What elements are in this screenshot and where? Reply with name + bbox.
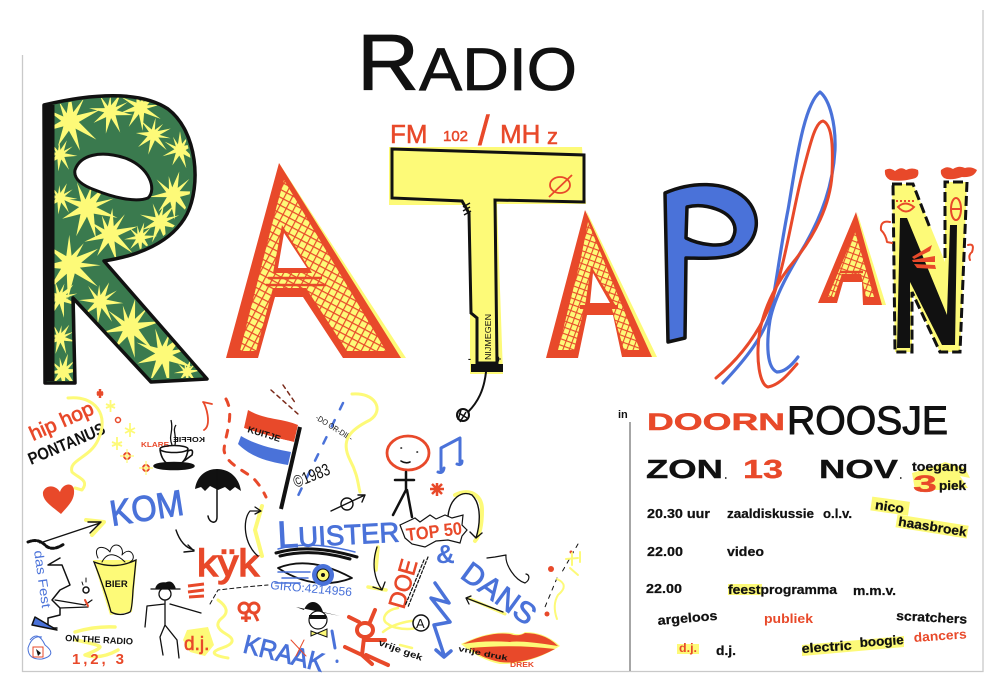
letter L, blue and red strokes	[716, 92, 835, 387]
admission yellow highlight	[912, 462, 970, 490]
blue zigzag arrow	[431, 583, 451, 657]
programme: video: video	[727, 544, 764, 559]
text: DOE vertical: DOE	[384, 556, 424, 612]
red crossed lines	[291, 640, 306, 656]
venue: DOORN: DOORN	[647, 409, 785, 436]
text: mirrored KOFFIE: KOFFIE	[173, 435, 205, 444]
text: KUITJE: KUITJE	[246, 424, 282, 444]
act: boogie: boogie	[859, 632, 904, 650]
text: in: in	[618, 409, 628, 421]
act: publiek: publiek	[764, 611, 814, 626]
name: nico	[870, 497, 910, 517]
arrow from DANS	[466, 596, 505, 614]
text: FM 102 / MHz: MH	[500, 119, 540, 149]
circled arrow	[331, 495, 365, 511]
admission: 3: 3	[913, 471, 937, 498]
panel: event information	[618, 399, 970, 671]
programme: zaaldiskussie: zaaldiskussie	[727, 506, 814, 521]
icon: lips	[461, 632, 560, 664]
highlight behind electric boogie	[802, 636, 904, 656]
dotted chain	[210, 585, 268, 604]
plus and minus signs: -	[468, 354, 471, 364]
logo scribble	[28, 636, 51, 659]
text: kijk: kÿk	[197, 543, 260, 585]
dashes above flag	[271, 385, 298, 414]
text: FM 102 / MHz: z	[547, 124, 558, 149]
text: FM 102 / MHz: /	[478, 107, 490, 154]
text: copyright 1983: ©1983	[290, 460, 333, 492]
red hair tufts	[885, 167, 977, 181]
text: das Fest: das Fest	[31, 549, 54, 609]
date periods	[725, 477, 902, 479]
T scribble	[463, 203, 471, 215]
arrow under Luister	[368, 547, 386, 590]
text: KLARE: KLARE	[141, 442, 169, 449]
sketch panel: doodles	[25, 385, 580, 676]
face: red mouth	[912, 245, 936, 269]
date: 13: 13	[743, 454, 783, 484]
icon: eye	[275, 545, 357, 586]
face: nose symbol	[951, 198, 961, 220]
act: dancers: dancers	[913, 626, 967, 645]
text: FM 102 / MHz: FM	[390, 119, 428, 149]
yellow blob with d.j.	[183, 627, 214, 656]
plus and minus signs: +	[496, 354, 501, 364]
symbol: crossed circle on T	[549, 175, 572, 197]
circled A: A	[416, 616, 425, 631]
admission: toegang: toegang	[912, 459, 967, 474]
text: NIJMEGEN: NIJMEGEN	[484, 314, 493, 360]
name: nico: nico	[874, 497, 905, 516]
text: ON THE RADIO: ON THE RADIO	[65, 633, 133, 647]
text: vrije druk: vrije druk	[458, 644, 510, 663]
red asterisk	[430, 483, 444, 496]
time: 22.00: 22.00	[647, 544, 683, 559]
letter T, yellow	[389, 147, 586, 422]
blue stroke	[723, 92, 835, 383]
yellow loops	[383, 608, 425, 648]
text: TOP 50: TOP 50	[405, 518, 463, 545]
face: eye	[896, 201, 914, 212]
dashed black line	[405, 557, 428, 607]
face: ears	[881, 222, 973, 260]
red creature	[345, 610, 388, 665]
heading: RADIO: RADIO	[357, 18, 577, 107]
text: KOM: KOM	[107, 482, 186, 534]
profile face	[32, 558, 92, 630]
text: hip hop: hip hop	[26, 398, 97, 446]
hair scribble	[28, 541, 64, 548]
flagpole	[281, 427, 300, 509]
time: 20.30 uur: 20.30 uur	[647, 506, 710, 521]
act: red d.j.: d.j.	[679, 641, 697, 655]
admission: piek: piek	[939, 478, 967, 493]
text: 1,2,3: 1,2, 3	[72, 651, 124, 668]
date: NOV.: NOV	[819, 454, 899, 484]
text: DREK: DREK	[510, 660, 535, 669]
text: Luister: LUISTER	[276, 509, 400, 557]
letter R, green and yellow splatter	[42, 94, 209, 385]
icon: coffee cup	[154, 420, 194, 470]
text: ON THE RADIO	[65, 627, 133, 668]
plug and cord	[457, 372, 486, 422]
yellow squiggle right of 1983	[346, 394, 377, 492]
text: BIER: BIER	[105, 579, 128, 590]
red dashed trail	[224, 399, 266, 497]
icon: blue music notes	[438, 438, 462, 472]
programme: o.l.v.: o.l.v.	[823, 506, 852, 521]
blue dashed line	[295, 403, 343, 502]
arrow to KOM	[40, 520, 104, 543]
programme: feestprogramma: feestprogramma	[728, 582, 838, 597]
name: haasbroek: haasbroek	[897, 514, 969, 540]
icon: heart	[43, 484, 74, 514]
highlight behind feest	[728, 584, 762, 595]
dancing man	[145, 582, 201, 658]
arrow from KOM to kijk	[176, 530, 194, 552]
icon: umbrella	[195, 469, 241, 522]
man with bowler hat	[296, 602, 340, 637]
act: argeloos: argeloos	[657, 608, 718, 628]
red venus symbols	[239, 603, 259, 622]
exclamation mark	[332, 631, 337, 662]
second letter A, red hatched	[546, 210, 657, 358]
battery base	[471, 364, 503, 372]
text: d.j.: d.j.	[184, 634, 209, 655]
red stroke	[716, 121, 832, 387]
letter P, blue	[665, 185, 756, 342]
icon: beer glass	[93, 545, 137, 615]
yellow zigzag	[214, 600, 232, 658]
divider with in	[629, 422, 631, 671]
icon: red music note	[203, 402, 212, 430]
letter A, red hatched	[226, 163, 406, 358]
burst: TOP 50	[400, 515, 467, 547]
small letter A, red hatched	[818, 212, 886, 305]
text: vrije gek: vrije gek	[377, 637, 425, 663]
text: FM 102 / MHz: 102	[443, 128, 468, 145]
flag: KUITJE	[238, 410, 300, 509]
yellow squiggle to heart	[68, 398, 102, 490]
ampersand: &	[436, 539, 455, 569]
act: electric: electric	[801, 638, 852, 656]
right dots and dashes	[544, 544, 580, 619]
highlight behind red d.j.	[677, 644, 699, 654]
act: scratchers: scratchers	[896, 608, 968, 627]
time: second 22.00: 22.00	[646, 581, 682, 596]
text: DANS: DANS	[455, 556, 542, 632]
stick figure with red head	[387, 436, 429, 517]
letter N, yellow and black with face	[881, 167, 977, 352]
arrow beside Luister	[245, 506, 262, 556]
act: black d.j.: d.j.	[716, 643, 736, 658]
text: PONTANUS: PONTANUS	[25, 419, 108, 469]
decorative stars and flowers	[97, 389, 153, 475]
curl line	[487, 555, 529, 583]
circled A	[413, 615, 429, 631]
venue: ROOSJE: ROOSJE	[787, 399, 948, 443]
date: ZON.: ZON	[646, 454, 723, 484]
text: DO OR DIE: -DO OR-DIE-	[314, 413, 355, 443]
text: GIRO: GIRO:4214956	[270, 578, 353, 599]
R counter	[75, 154, 152, 200]
programme: m.m.v.: m.m.v.	[853, 583, 896, 598]
equals sign	[188, 584, 204, 597]
arrow above TOP 50	[448, 492, 482, 541]
